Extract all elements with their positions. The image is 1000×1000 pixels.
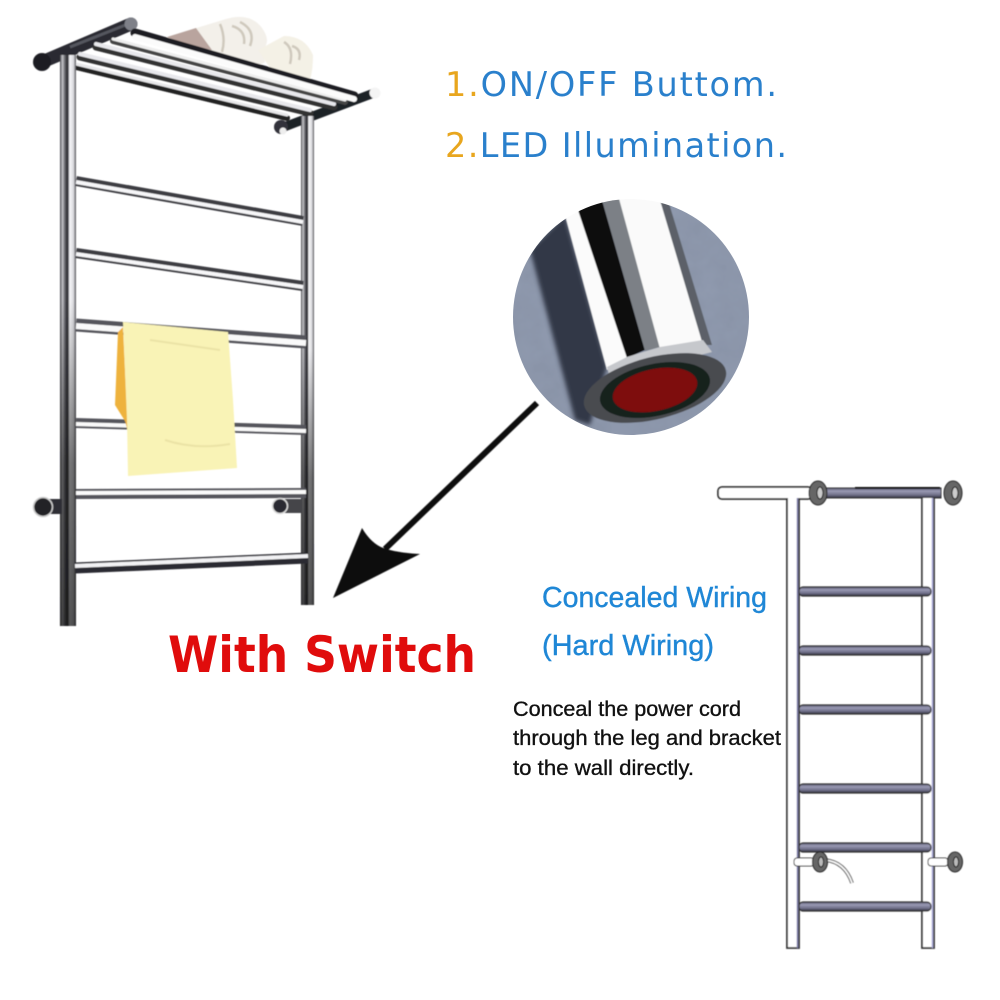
concealed wiring heading: Concealed Wiring bbox=[542, 582, 767, 614]
shelf cross bars bbox=[33, 18, 380, 134]
rung 1 bbox=[76, 181, 303, 222]
rolled white towels bbox=[167, 17, 313, 80]
photo: towel rack with shelf and towels bbox=[33, 17, 380, 626]
yellow hanging towel bbox=[115, 322, 237, 476]
ladder rungs bbox=[799, 587, 931, 911]
concealed wiring description: through the leg and bracket bbox=[513, 727, 781, 750]
top flange left bbox=[809, 481, 827, 505]
circular detail photo: switch with red LED bbox=[510, 195, 755, 440]
concealed wiring heading bbox=[542, 582, 767, 662]
right leg bbox=[301, 116, 314, 605]
left leg bbox=[60, 55, 76, 626]
With Switch label: With Switch bbox=[168, 626, 476, 684]
lower left bracket with cable bbox=[794, 852, 852, 883]
line drawing: hard wiring rack bbox=[718, 481, 962, 948]
concealed wiring description: Conceal the power cord bbox=[513, 698, 741, 721]
wall bracket right bbox=[272, 498, 302, 514]
top bar right part bbox=[825, 487, 941, 498]
top flange right bbox=[944, 481, 962, 505]
rung 5 bbox=[76, 492, 306, 494]
top bar left part bbox=[718, 487, 812, 499]
rung 3 bbox=[76, 325, 306, 343]
rung 6 bbox=[75, 556, 308, 568]
feature list bbox=[445, 65, 787, 165]
rung 2 bbox=[76, 253, 303, 287]
item 1: 1.ON/OFF Buttom. bbox=[445, 65, 777, 104]
right leg bbox=[922, 498, 934, 948]
item 2: 2.LED Illumination. bbox=[445, 126, 787, 165]
left leg bbox=[787, 498, 799, 948]
lower right bracket bbox=[928, 852, 962, 872]
arrow pointing to switch bbox=[333, 403, 537, 598]
shelf rails bbox=[76, 33, 354, 118]
concealed wiring description: to the wall directly. bbox=[513, 757, 694, 780]
wall bracket left bbox=[34, 498, 62, 516]
rung 4 bbox=[76, 423, 306, 431]
concealed wiring heading: (Hard Wiring) bbox=[542, 630, 714, 662]
concealed wiring description bbox=[513, 698, 781, 780]
